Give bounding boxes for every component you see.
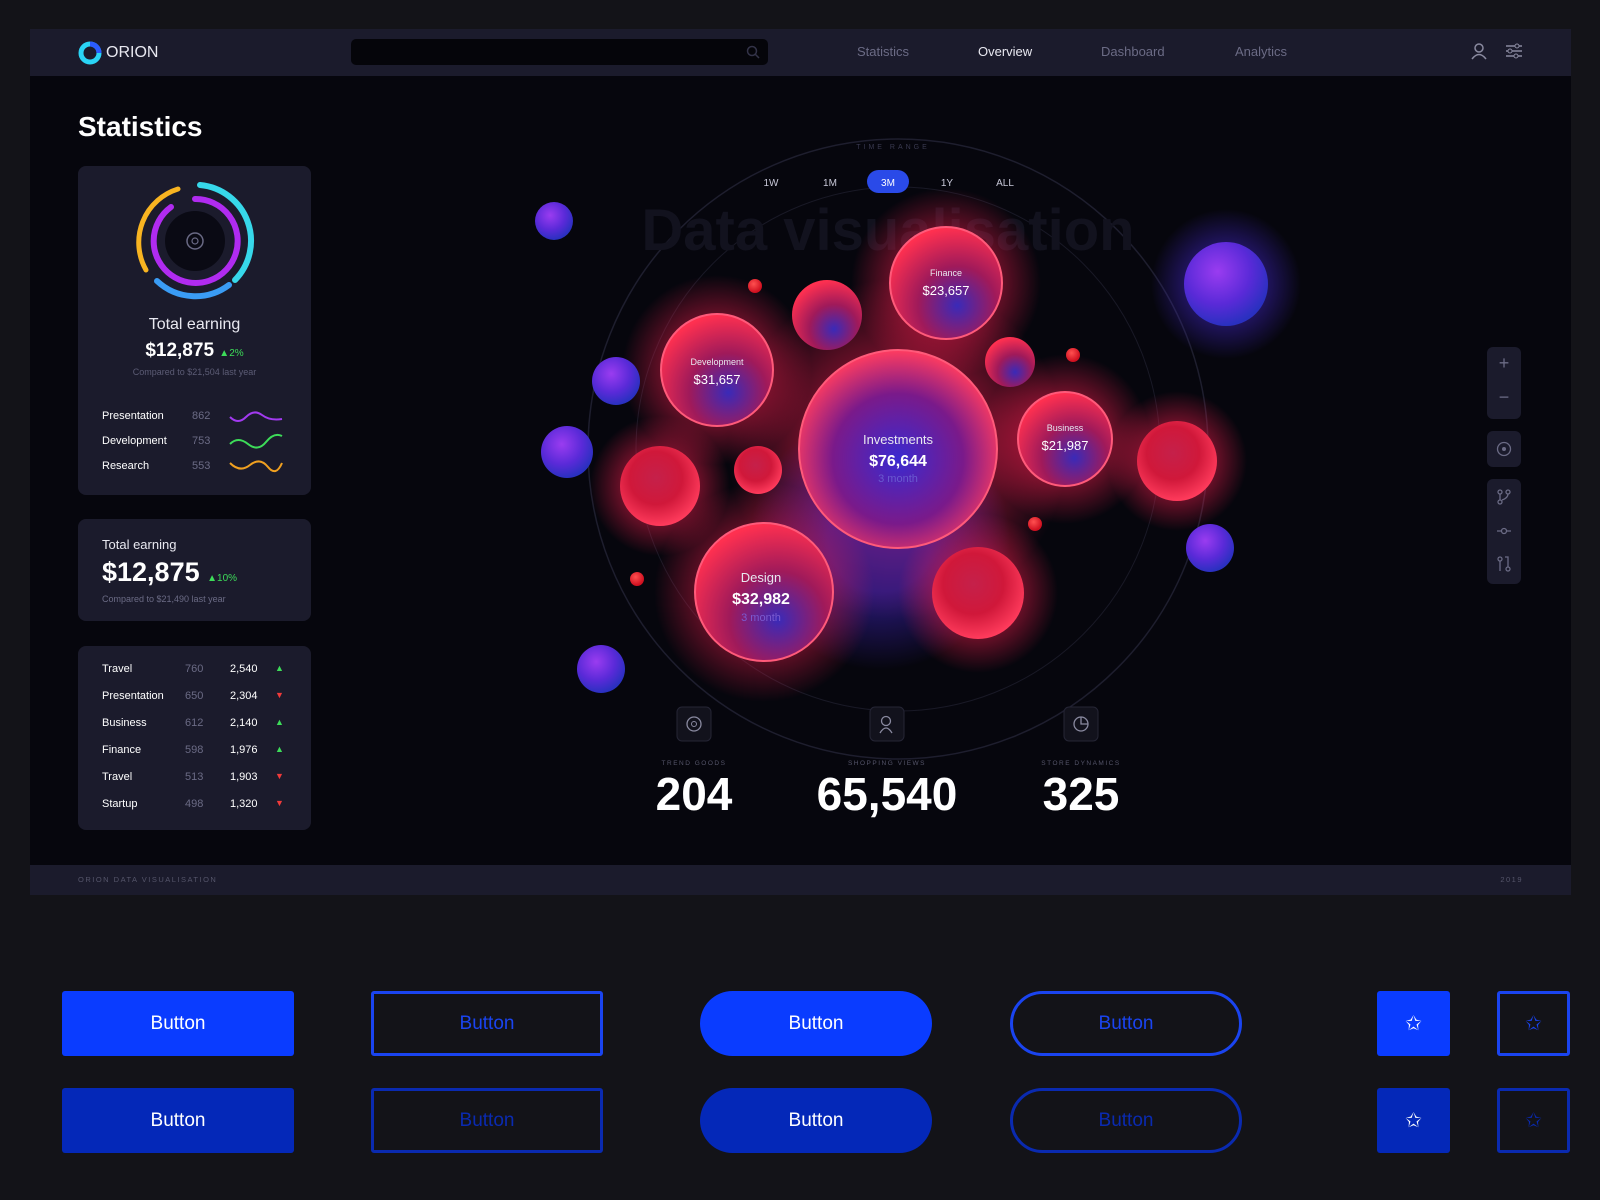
sparkline list: 553: [192, 460, 210, 472]
text: Button: [789, 1110, 843, 1130]
icon button outline: [1497, 991, 1570, 1056]
icon button filled dark: ✩: [1405, 1110, 1422, 1132]
bubble: design: 3 month: [741, 612, 781, 624]
panel: total earning summary: Compared to $21,490 last year: [102, 594, 226, 604]
dashboard panel: [30, 29, 1571, 895]
time range selector: TIME RANGE: [856, 144, 930, 151]
time range selector: 1Y: [941, 178, 953, 189]
buttons row 2: [62, 1088, 294, 1153]
search bar: [351, 39, 768, 65]
buttons row 1: Button: [151, 1012, 205, 1034]
bubble: business: [1018, 392, 1112, 486]
panel: category table: Startup: [102, 798, 137, 810]
text: Button: [1099, 1110, 1153, 1130]
panel: category table: Presentation: [102, 690, 164, 702]
bubble chart: [535, 138, 1298, 820]
panel: total earning summary: $12,875 ▲10%: [102, 557, 237, 587]
nav links: Statistics: [857, 44, 909, 59]
time range selector: 3M: [881, 178, 895, 189]
logo: [78, 42, 158, 64]
header bar: [30, 29, 1571, 76]
panel: category table: 498: [185, 798, 203, 810]
text: Button: [789, 1012, 843, 1034]
zoom controls: −: [1499, 387, 1509, 407]
footer bar: ORION DATA VISUALISATION: [78, 875, 217, 884]
sparkline list: [102, 410, 283, 472]
text: Dashboard: [1101, 44, 1165, 59]
time range selector: [764, 144, 1014, 193]
bubble: business: $21,987: [1042, 438, 1088, 453]
panel: category table: ▼: [275, 798, 284, 808]
text: Button: [460, 1012, 514, 1034]
panel: category table: 612: [185, 717, 203, 729]
text: Overview: [978, 44, 1032, 59]
KPI stats: 325: [1043, 768, 1119, 820]
panel: total earning summary: Total earning: [102, 537, 176, 552]
panel: category table: ▲: [275, 663, 284, 673]
KPI stats: SHOPPING VIEWS: [848, 760, 926, 767]
icon button outline dark: [1497, 1088, 1570, 1153]
icon button outline: ✩: [1525, 1013, 1542, 1035]
branch controls: [1487, 479, 1521, 584]
bubble: finance: [890, 227, 1002, 339]
bubble: business: Business: [1047, 423, 1084, 433]
bubble: design: Design: [741, 570, 781, 585]
KPI stats: [656, 707, 1121, 820]
panel: category table: Travel: [102, 663, 132, 675]
time range selector: 1M: [823, 178, 837, 189]
KPI stats: STORE DYNAMICS: [1041, 760, 1121, 767]
title: Statistics: [78, 111, 202, 142]
panel: category table: ▼: [275, 771, 284, 781]
bubble: development: [661, 314, 773, 426]
bubble: development: $31,657: [694, 372, 740, 387]
panel: total earning summary: [78, 519, 311, 621]
KPI stats: 65,540: [817, 768, 957, 820]
bubble: design: $32,982: [732, 591, 790, 608]
time range selector: ALL: [996, 178, 1014, 189]
panel: category table: 598: [185, 744, 203, 756]
sparkline list: Research: [102, 460, 149, 472]
footer bar: 2019: [1500, 875, 1523, 884]
text: Button: [460, 1110, 514, 1130]
footer bar: [30, 865, 1571, 895]
sparkline list: Presentation: [102, 410, 164, 422]
icon button outline dark: ✩: [1525, 1110, 1542, 1132]
glows: [728, 279, 1068, 619]
text: Button: [1099, 1012, 1153, 1034]
bubble: investments: Investments: [863, 432, 934, 447]
panel: category table: 760: [185, 663, 203, 675]
sparkline list: 753: [192, 435, 210, 447]
zoom controls: +: [1499, 353, 1509, 373]
unlabelled red bubbles: [620, 279, 1217, 639]
bubble: investments: $76,644: [869, 453, 927, 470]
panel: category table: ▲: [275, 717, 284, 727]
panel: category table: 513: [185, 771, 203, 783]
donut chart: [136, 182, 254, 300]
panel: category table: [78, 646, 311, 830]
panel: total earning donut card: Total earning: [149, 316, 240, 333]
bubble: investments: [799, 350, 997, 548]
purple bubbles: [535, 202, 1268, 693]
icon: user: [1472, 43, 1486, 60]
panel: category table: Finance: [102, 744, 141, 756]
panel: total earning donut card: [78, 166, 311, 495]
panel: category table: ▼: [275, 690, 284, 700]
panel: category table: ▲: [275, 744, 284, 754]
icon button filled: ✩: [1405, 1013, 1422, 1035]
panel: category table: 1,903: [230, 771, 258, 783]
icon button filled dark: [1377, 1088, 1450, 1153]
panel: category table: 1,320: [230, 798, 258, 810]
watermark title: Data visualisation: [641, 198, 1135, 263]
panel: category table: 1,976: [230, 744, 258, 756]
panel: category table: Travel: [102, 771, 132, 783]
icon button filled: [1377, 991, 1450, 1056]
time range selector: 1W: [764, 178, 779, 189]
bubble: finance: Finance: [930, 268, 962, 278]
sparkline list: 862: [192, 410, 210, 422]
KPI stats: 204: [656, 768, 733, 820]
bubble: design: [695, 523, 833, 661]
panel: total earning donut card: $12,875 ▲2%: [145, 340, 244, 361]
bubble: finance: $23,657: [922, 283, 970, 298]
bubble: investments: 3 month: [878, 473, 918, 485]
panel: total earning donut card: Compared to $21,504 last year: [133, 367, 256, 377]
locate control: [1487, 431, 1521, 467]
panel: category table: 650: [185, 690, 203, 702]
icon: settings: [1506, 44, 1522, 58]
buttons row 1: [62, 991, 294, 1056]
orbit rings: [588, 139, 1208, 759]
logo: ORION: [106, 44, 158, 61]
panel: category table: 2,540: [230, 663, 258, 675]
buttons row 2: Button: [151, 1110, 205, 1130]
panel: category table: 2,140: [230, 717, 258, 729]
bubble: development: Development: [690, 357, 744, 367]
sparkline list: Development: [102, 435, 167, 447]
text: Analytics: [1235, 44, 1287, 59]
panel: category table: Business: [102, 717, 147, 729]
zoom controls: [1487, 347, 1521, 419]
KPI stats: TREND GOODS: [662, 760, 726, 767]
panel: category table: 2,304: [230, 690, 258, 702]
